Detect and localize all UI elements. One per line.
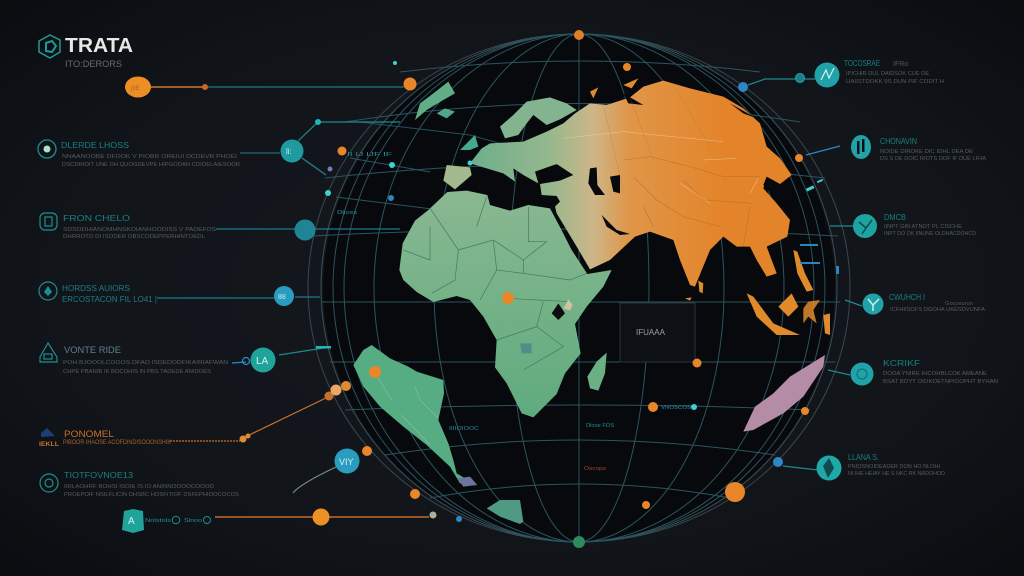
orange nodes	[338, 63, 809, 509]
ring 2	[204, 516, 210, 524]
Britain	[460, 135, 478, 150]
Africa	[399, 191, 612, 417]
item: right 6	[816, 452, 940, 480]
body text: ERCOSTACON FIL LO41 |	[62, 295, 157, 304]
Madagascar	[587, 353, 607, 391]
Greenland	[415, 82, 455, 120]
item: left 4	[40, 343, 228, 366]
heading: FRON CHELO	[63, 213, 130, 223]
caption 2: Slnoo	[184, 518, 202, 524]
icon	[38, 140, 56, 158]
Patagonia tip	[457, 477, 477, 487]
end nodes	[430, 512, 436, 518]
node	[862, 294, 884, 314]
node: left 3: 88	[278, 294, 286, 301]
node	[850, 362, 874, 386]
item: left 4 second line: CHPE PBANIB IK BOCOHIS IN PBS TADEDE ANIDOES	[63, 369, 211, 375]
lake and spot	[563, 299, 573, 311]
African borders	[403, 197, 587, 370]
item: left 6	[40, 470, 214, 492]
small globe labels: IIIIOIOOC	[449, 426, 479, 432]
node: left 6: VIY	[339, 457, 354, 467]
continents	[399, 78, 830, 432]
Iberia	[443, 165, 472, 189]
heading: DLERDE LHOSS	[61, 140, 129, 150]
heading: HORDSS AUIORS	[62, 283, 130, 293]
node: left 6	[334, 448, 360, 474]
heading: DMCB	[884, 212, 906, 222]
Iceland and north Europe islands	[437, 108, 455, 118]
label box: IFUAAA	[636, 327, 665, 337]
body text: NOIDE DIROKE DIC IDHL DEA DE	[880, 149, 973, 155]
item: left 2	[40, 213, 216, 233]
item: right 5 second line: BSAT BOYT OIOKOETNPIOOPHT BYHAN	[883, 379, 998, 385]
node	[796, 62, 840, 88]
globe ocean disc	[323, 34, 835, 542]
heading: VONTE RIDE	[64, 345, 121, 355]
node: left 4: LA	[256, 356, 269, 367]
Asian borders	[603, 90, 760, 247]
item: right 3	[853, 212, 962, 238]
item: left 5	[39, 428, 171, 448]
globe	[308, 30, 850, 548]
node	[851, 135, 871, 159]
top orange node: jIIE	[130, 86, 140, 92]
orange stop	[312, 508, 330, 526]
node: left 1: li:	[286, 147, 292, 156]
node	[853, 214, 877, 238]
logo and title	[39, 35, 133, 70]
heading: TOCOSRAE	[844, 58, 880, 68]
icon	[40, 474, 58, 492]
heading: CHONAVIN	[880, 136, 917, 146]
tag: IFRo	[893, 61, 908, 68]
caption: Nolstols	[145, 518, 171, 524]
southern landmass	[487, 500, 523, 524]
item: right 1 second line: UAIISTDOKK 9S DUN PIF CODIT H	[846, 79, 944, 85]
item: right 5	[850, 358, 987, 386]
Scandinavia	[500, 97, 577, 138]
small red label: Oscops	[584, 466, 607, 472]
small globe labels: II IJ IJF IF	[347, 152, 393, 158]
heading: CWUHCH I	[889, 292, 925, 302]
node: left 1	[280, 119, 332, 172]
item: left 3	[39, 282, 157, 304]
globe nodes	[325, 30, 839, 548]
heading: LLANA S.	[848, 452, 879, 462]
cyan accents	[325, 61, 839, 410]
body text: POH BJOOOLCOOOS DFAO ISDEDODFIKAIRIAFWAN	[63, 360, 228, 366]
node: left 2	[294, 220, 316, 240]
body text: Gocosuron	[945, 301, 973, 307]
icon: IEKLL	[39, 442, 59, 448]
item: right 1	[796, 58, 929, 88]
logo icon	[39, 35, 60, 58]
small globe labels	[337, 152, 691, 432]
item: bottom	[122, 508, 436, 533]
item: left 1 second line: DSCDRIOIT UNE DH QUOGDEVPE HIPGODAN CDIOELAIESOOR	[62, 162, 240, 168]
item: left 1	[38, 140, 238, 160]
icon	[40, 343, 57, 362]
icon	[39, 282, 57, 300]
item: left 6 second line: PROEPOIF NSILFLICIN DHSBC HOSFITIOF DSFEPHIOOCOCOS	[64, 492, 239, 498]
body text: PIBOOR IHAOSE ACOFDINDISOOONSHIK	[63, 440, 171, 446]
item: right 2 second line: DS S DE DOIC RIOTS DOF IF DUE LIFIA	[880, 156, 986, 162]
node: left 4	[242, 346, 331, 372]
title: TRATA	[65, 35, 133, 57]
ring 1	[172, 516, 180, 524]
hexagon icon	[122, 509, 144, 533]
node	[816, 456, 842, 480]
small globe labels: Dlioss	[337, 210, 357, 216]
Australia	[743, 355, 825, 432]
body text: IIRLAOHRF BOHSI ISOIE IS IO ANINNOOOOCOOOD	[64, 484, 214, 490]
top orange node	[125, 76, 208, 98]
globe grid	[308, 34, 850, 542]
heading: KCRIKF	[883, 358, 920, 368]
connectors	[150, 79, 862, 517]
node: left 3	[274, 286, 294, 306]
body text: IPICHIR DUL DAIDSOK CUE DE	[846, 71, 929, 77]
heading: PONOMEL	[64, 429, 114, 440]
seas	[588, 93, 790, 235]
Indonesia and islands	[590, 78, 830, 335]
item: right 4 body: ICFHIISOFS DGOHA UKESDVUNFA	[890, 307, 985, 313]
body text: DOOA YNIRE IHCOHBLCOK AMEANE	[883, 371, 987, 377]
Eurasia	[470, 81, 792, 287]
body text: PNIOSNOIDEADER DON HO NLOHI	[848, 464, 940, 470]
item: right 6 second line: NI IHE HEIAY HE S NKC RK NRDOHOD	[848, 471, 945, 477]
body text: SDSODHIANOMHNSKOIANHOODISS V PADEFOS	[63, 227, 216, 233]
item: left 2 second line: DHRROTO DI ISODER OBSCODEPPERHINTOEDL	[63, 234, 205, 240]
blue nodes	[388, 82, 783, 522]
top and bottom poles	[574, 30, 584, 40]
South America	[353, 345, 477, 485]
label box	[620, 303, 695, 362]
subtitle: ITO:DERORS	[65, 59, 122, 70]
small globe labels: Dlooe FOS	[586, 423, 614, 429]
South America and southern land	[353, 345, 523, 524]
body text: NNAANOOBE DFOOK V PIOBR OREIUI DCDEVR PHOEI	[62, 154, 238, 160]
node: left 5	[240, 381, 351, 442]
item: right 4	[862, 292, 973, 314]
Asian route lines	[563, 132, 758, 203]
hexagon icon: A	[128, 516, 135, 527]
icon	[40, 213, 57, 230]
South America rivers	[375, 373, 438, 445]
item: right 2	[851, 135, 973, 159]
heading: TIOTFOVNOE13	[64, 470, 133, 480]
item: right 3 second line: INPT DO OK IINUNE OLDHACDOHCD	[884, 231, 976, 237]
small globe labels: VNOSCOS	[661, 405, 691, 411]
body text: IINPT GIN ATNOT PL CISCHE	[884, 224, 962, 230]
